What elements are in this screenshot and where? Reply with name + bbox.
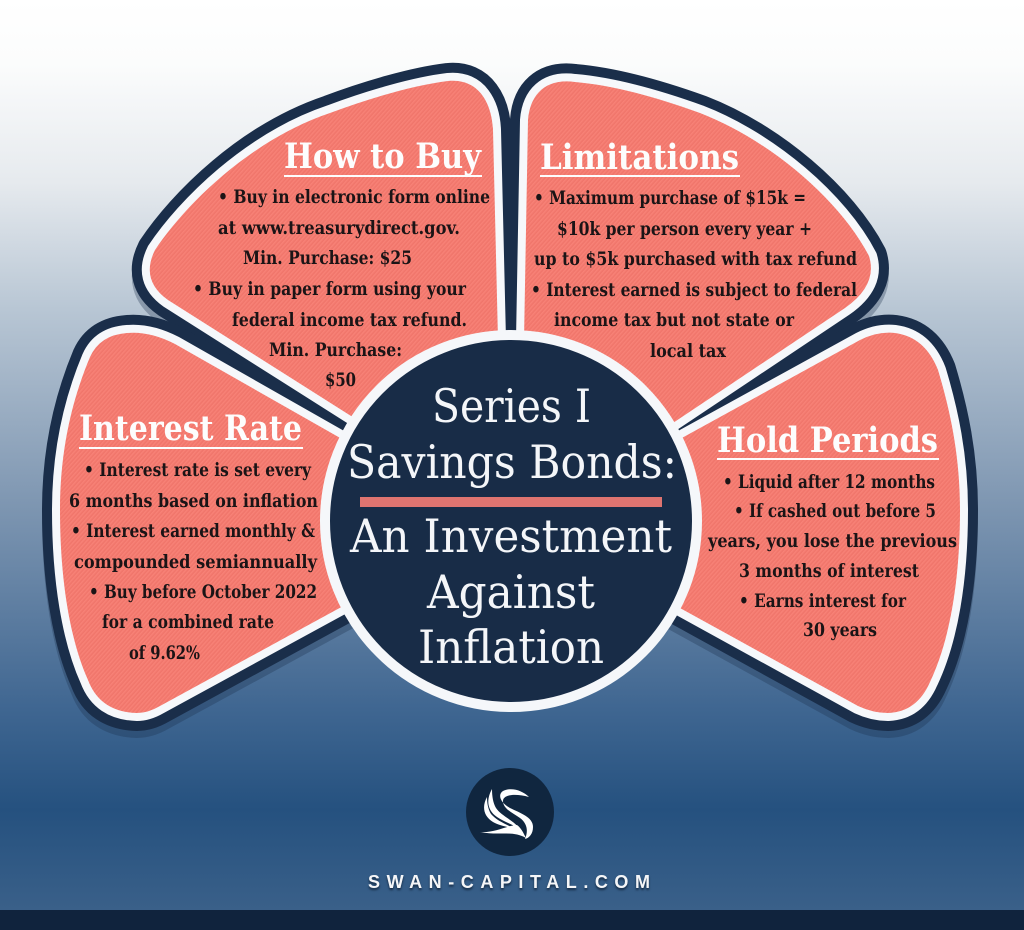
panel drop shadows [60,88,960,720]
text block: Limitations details [531,188,857,362]
title: Series I Savings Bonds: Savings Bonds: [347,435,677,489]
text block: Interest Rate details: for a combined rate [102,612,274,633]
text block: Limitations details: • Interest earned is subject to federal [531,280,857,301]
text block: Hold Periods details: • Liquid after 12 months [723,472,935,493]
text block: Limitations details: local tax [650,341,727,362]
text block: Interest Rate details: of 9.62% [129,643,200,664]
heading: Hold Periods: Hold Periods [717,420,938,461]
heading: Interest Rate: Interest Rate [79,408,302,449]
text block: Interest Rate details: • Buy before October 2022 [89,582,317,603]
text block: How to Buy details: • Buy in paper form using your [193,279,466,300]
panel: Limitations [520,81,871,445]
subtitle: An Investment Against Inflation [349,509,672,674]
text block: Interest Rate details: • Interest earned monthly & [71,521,315,542]
text block: Limitations details: • Maximum purchase of $15k = [534,188,806,209]
text block: Interest Rate details: 6 months based on inflation [69,491,318,512]
panel: Hold Periods [620,333,960,713]
text block: Hold Periods details [707,472,957,641]
text block: Limitations details: income tax but not state or [554,310,794,331]
subtitle: An Investment Against Inflation: Against [426,565,595,619]
heading: How to Buy: How to Buy [284,136,482,177]
text block: Hold Periods details: 3 months of interest [739,561,919,582]
footer band [0,910,1024,930]
subtitle: An Investment Against Inflation: An Investment [349,509,672,563]
text block: Interest Rate details: compounded semiannually [74,552,318,573]
text block: Hold Periods details: years, you lose the previous [707,531,957,552]
text block: How to Buy details: • Buy in electronic form online [218,187,490,208]
text block: Limitations details: $10k per person every year + [557,219,812,240]
text block: How to Buy details: federal income tax refund. [232,310,467,331]
text block: How to Buy details: at www.treasurydirect.gov. [218,218,460,239]
text block: How to Buy details: Min. Purchase: [269,340,402,361]
text block: Hold Periods details: 30 years [803,620,877,641]
title: Series I Savings Bonds: Series I [432,379,591,433]
icon: swan logo [466,768,554,856]
panel: Interest Rate [60,333,400,713]
text block: How to Buy details: Min. Purchase: $25 [243,248,412,269]
subtitle: An Investment Against Inflation: Inflation [418,620,604,674]
heading: Limitations: Limitations [540,137,739,178]
center circle: title [325,335,697,707]
text block: Hold Periods details: • If cashed out before 5 [734,501,936,522]
panel dark outlines [60,81,960,713]
text block: Limitations details: up to $5k purchased with tax refund [534,249,857,270]
panel: How to Buy [150,81,500,447]
text block: How to Buy details: $50 [325,370,356,391]
text block: Interest Rate details [69,460,318,664]
title divider bar [360,497,662,507]
text block: Interest Rate details: • Interest rate is set every [84,460,312,481]
text block: How to Buy details [193,187,490,391]
title: Series I Savings Bonds [347,379,677,489]
text block: Hold Periods details: • Earns interest for [739,591,906,612]
website label: SWAN-CAPITAL.COM [368,872,650,892]
